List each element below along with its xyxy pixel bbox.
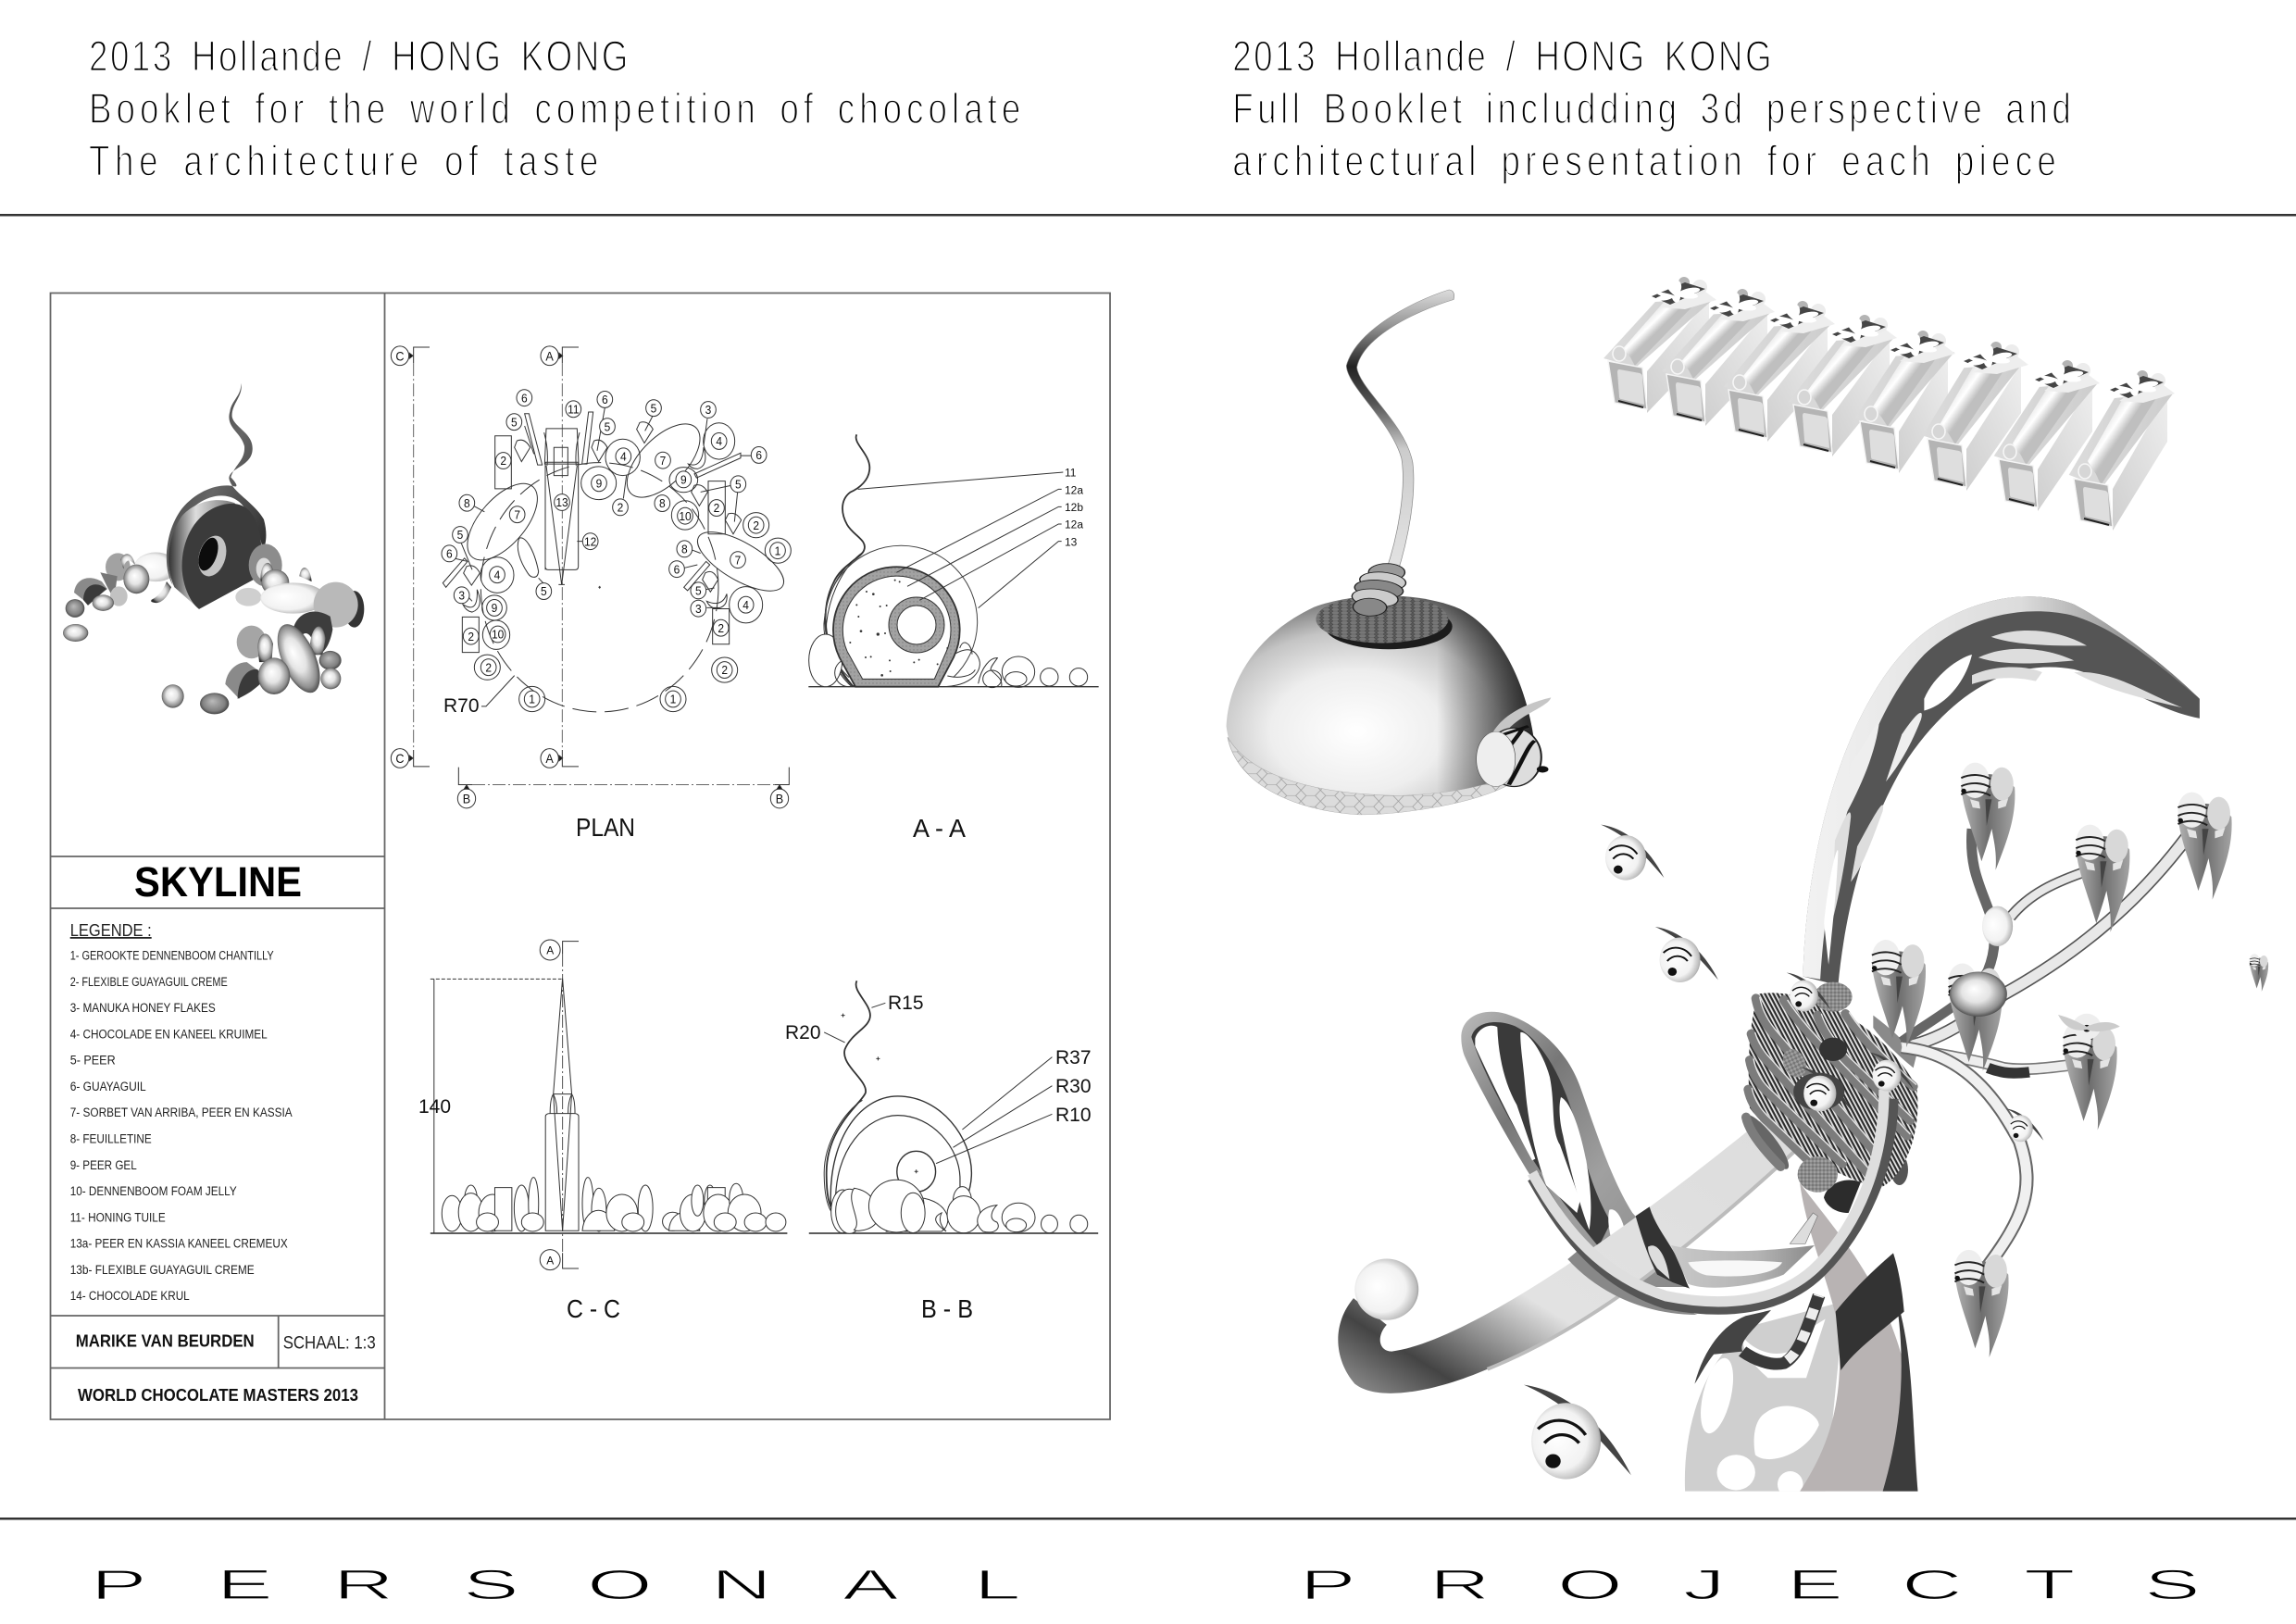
elements xyxy=(443,407,792,712)
numbered callouts: 8 xyxy=(681,543,688,556)
numbered callouts: 4 xyxy=(716,435,722,448)
header rule xyxy=(0,214,2296,217)
legend: 7- SORBET VAN ARRIBA, PEER EN KASSIA xyxy=(70,1106,293,1119)
numbered callouts: 3 xyxy=(705,404,711,417)
heading: left header text: 2013 Hollande / HONG KONG xyxy=(89,32,628,80)
legend: 2- FLEXIBLE GUAYAGUIL CREME xyxy=(70,975,228,989)
numbered callouts: 2 xyxy=(753,518,759,532)
numbered callouts: 2 xyxy=(485,661,492,674)
legend: 1- GEROOKTE DENNENBOOM CHANTILLY xyxy=(70,949,274,963)
ribbon xyxy=(167,383,266,585)
numbered callouts: 6 xyxy=(755,449,762,462)
drawing: section A-A: 11 xyxy=(1065,467,1077,480)
numbered callouts: 3 xyxy=(695,602,702,616)
author name: MARIKE VAN BEURDEN xyxy=(76,1332,255,1351)
numbered callouts: 5 xyxy=(735,478,742,492)
numbered callouts: 8 xyxy=(659,497,666,510)
3d view: sculpture with bees xyxy=(1338,596,2268,1497)
legend: 5- PEER xyxy=(70,1054,116,1068)
hive xyxy=(1739,982,1917,1193)
heading: right header text: Full Booklet includding 3d perspective and xyxy=(1232,84,2071,132)
numbered callouts: 6 xyxy=(674,563,680,576)
label: R10: R10 xyxy=(1055,1105,1092,1126)
numbered callouts: 1 xyxy=(529,693,535,706)
numbered callouts: 5 xyxy=(511,416,518,429)
numbered callouts: 9 xyxy=(596,477,602,491)
footer title: personal projects: PERSONAL PROJECTS xyxy=(91,1562,2201,1608)
label: R30: R30 xyxy=(1055,1076,1092,1097)
label: R20: R20 xyxy=(785,1022,821,1043)
panel: technical drawing sheet xyxy=(50,293,1110,1419)
heading: left header text: Booklet for the world competition of chocolate xyxy=(89,84,1020,132)
numbered callouts: 7 xyxy=(514,508,520,521)
numbered callouts: 4 xyxy=(620,450,627,464)
drawing: plan view xyxy=(391,346,792,808)
numbered callouts: 5 xyxy=(457,529,463,542)
legend xyxy=(70,921,293,1303)
boomerang xyxy=(1803,596,2200,985)
competition name: WORLD CHOCOLATE MASTERS 2013 xyxy=(78,1386,358,1405)
numbered callouts: 2 xyxy=(468,630,474,643)
drawing: section A-A: 12b xyxy=(1065,501,1083,514)
legend: LEGENDE : xyxy=(70,921,152,940)
numbered callouts xyxy=(442,390,785,707)
numbered callouts: 6 xyxy=(521,392,528,405)
label: C - C: C - C xyxy=(567,1294,620,1323)
numbered callouts: 7 xyxy=(735,554,741,567)
label: R37: R37 xyxy=(1055,1047,1092,1068)
dome xyxy=(1227,595,1536,815)
lower lattice and swoosh band xyxy=(1685,1183,1917,1497)
section marks: B xyxy=(463,792,470,806)
drawing: section A-A: 12a xyxy=(1065,518,1083,531)
section marks xyxy=(391,346,789,808)
numbered callouts: 5 xyxy=(541,585,547,598)
drawing: section B-B xyxy=(809,981,1098,1233)
patch, platform and lower ribbon xyxy=(1532,1090,1891,1315)
numbered callouts: 11 xyxy=(568,403,580,417)
numbered callouts: 9 xyxy=(680,473,687,487)
numbered callouts: 7 xyxy=(660,454,666,468)
numbered callouts: 4 xyxy=(742,598,749,612)
numbered callouts: 8 xyxy=(464,496,470,510)
numbered callouts: 10 xyxy=(679,509,692,523)
heading: left header text xyxy=(89,32,1020,184)
bee on dome xyxy=(1477,697,1551,786)
coil xyxy=(1349,564,1409,618)
legend: 6- GUAYAGUIL xyxy=(70,1080,146,1093)
numbered callouts: 2 xyxy=(714,502,719,515)
numbered callouts: 10 xyxy=(492,628,504,642)
3d view: skyline dessert xyxy=(63,383,364,714)
numbered callouts: 1 xyxy=(775,544,780,557)
drawing: section C-C: A xyxy=(546,1254,554,1267)
numbered callouts: 2 xyxy=(718,621,724,635)
numbered callouts: 1 xyxy=(670,693,676,706)
heading: left header text: The architecture of taste xyxy=(89,137,598,184)
footer rule xyxy=(0,1518,2296,1520)
title: skyline: SKYLINE xyxy=(134,858,302,906)
numbered callouts: 5 xyxy=(695,584,702,598)
section marks: A xyxy=(545,752,554,766)
dark band panels xyxy=(1790,1181,1904,1370)
legend: 11- HONING TUILE xyxy=(70,1210,166,1224)
legend: 3- MANUKA HONEY FLAKES xyxy=(70,1001,216,1015)
bees xyxy=(1524,763,2268,1480)
drawing: section C-C: A xyxy=(546,944,554,957)
label: 140: 140 xyxy=(418,1096,451,1118)
legend: 4- CHOCOLADE EN KANEEL KRUIMEL xyxy=(70,1027,268,1041)
stem xyxy=(1346,290,1454,574)
legend: 13a- PEER EN KASSIA KANEEL CREMEUX xyxy=(70,1237,288,1251)
section marks: C xyxy=(395,752,405,766)
section marks: A xyxy=(545,349,554,363)
numbered callouts: 5 xyxy=(605,420,610,433)
numbered callouts: 12 xyxy=(584,535,596,548)
heading: right header text xyxy=(1232,32,2071,184)
3d view: dome with stem and bee xyxy=(1227,290,1551,815)
section marks: C xyxy=(395,349,405,363)
heading: right header text: 2013 Hollande / HONG KONG xyxy=(1232,32,1772,80)
numbered callouts: 2 xyxy=(618,501,623,515)
legend: 10- DENNENBOOM FOAM JELLY xyxy=(70,1184,237,1198)
legend: 14- CHOCOLADE KRUL xyxy=(70,1289,190,1303)
sheet frame and title-block grid xyxy=(50,293,1110,1419)
drawing: section A-A xyxy=(808,434,1099,688)
numbered callouts: 4 xyxy=(494,568,500,581)
numbered callouts: 2 xyxy=(721,664,728,677)
section marks: B xyxy=(776,792,783,806)
legend: 9- PEER GEL xyxy=(70,1158,137,1172)
numbered callouts: 6 xyxy=(602,394,608,406)
label: B - B: B - B xyxy=(921,1294,973,1323)
numbered callouts: 9 xyxy=(492,602,497,615)
hex band xyxy=(1228,737,1509,815)
label: plan: PLAN xyxy=(576,813,635,842)
label: R15: R15 xyxy=(888,993,924,1014)
drawing: section A-A: 12a xyxy=(1065,483,1083,496)
legend: 13b- FLEXIBLE GUAYAGUIL CREME xyxy=(70,1263,255,1277)
heading: right header text: architectural presentation for each piece xyxy=(1232,137,2056,184)
loop body with openings xyxy=(1461,1012,1688,1287)
drawing: section C-C xyxy=(430,940,787,1270)
numbered callouts: 6 xyxy=(446,547,453,561)
numbered callouts: 2 xyxy=(500,455,506,468)
scale note: SCHAAL: 1:3 xyxy=(283,1334,376,1354)
label: A - A: A - A xyxy=(913,814,966,843)
numbered callouts: 13 xyxy=(555,496,568,509)
top disc xyxy=(1325,604,1453,649)
hook tube xyxy=(1338,1099,1819,1393)
numbered callouts: 3 xyxy=(458,589,465,603)
3d view: row of eight dessert boxes xyxy=(1588,277,2175,531)
R70 path circle xyxy=(480,463,718,712)
label: R70: R70 xyxy=(443,695,480,717)
legend: 8- FEUILLETINE xyxy=(70,1131,152,1146)
branches xyxy=(1902,829,2189,1266)
sphere end xyxy=(1354,1258,1418,1320)
disc xyxy=(168,500,259,609)
drawing: section A-A: 13 xyxy=(1065,535,1078,548)
numbered callouts: 5 xyxy=(651,402,656,415)
